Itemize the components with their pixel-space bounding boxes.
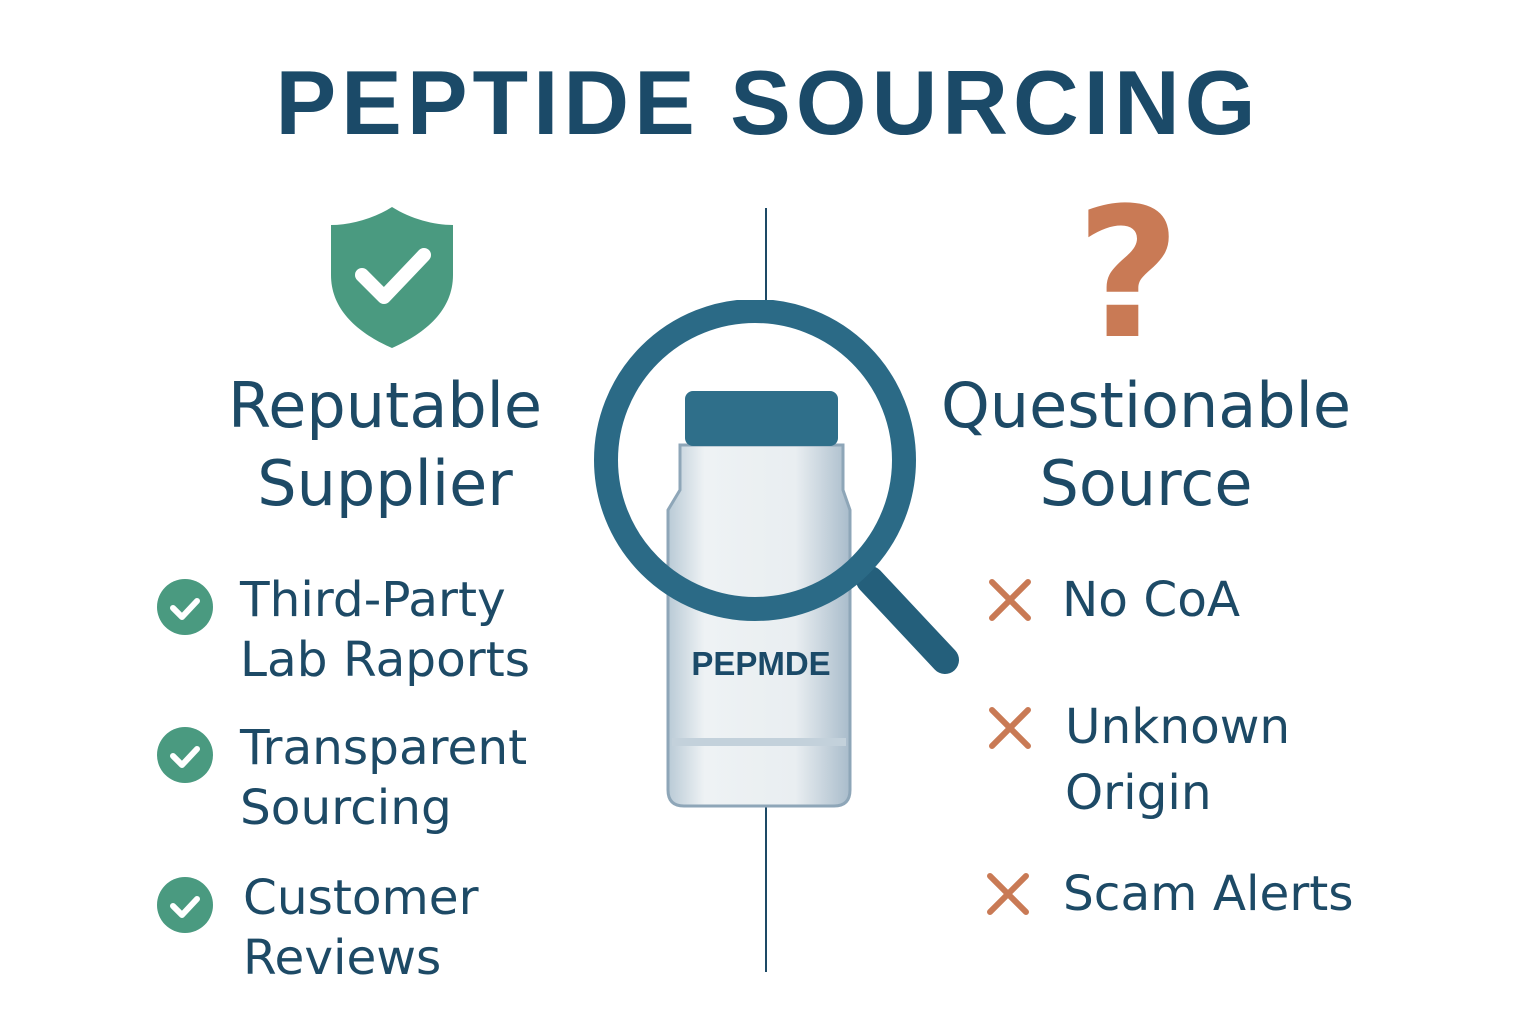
- heading: reputable supplier: [228, 369, 542, 520]
- list: questionable: Unknown: [1065, 699, 1290, 755]
- list: questionable: Scam Alerts: [1063, 866, 1354, 922]
- list: reputable: Sourcing: [240, 780, 452, 836]
- title: PEPTIDE SOURCING: [275, 53, 1261, 154]
- list: questionable: No CoA: [1062, 572, 1240, 628]
- heading: questionable source: Questionable: [941, 369, 1351, 442]
- heading: questionable source: [941, 369, 1351, 520]
- item 1: [989, 572, 1240, 628]
- item 3: [157, 870, 479, 986]
- list: reputable: Transparent: [240, 720, 527, 776]
- icon: vial and magnifier: PEPMDE: [691, 645, 831, 682]
- list: reputable: Reviews: [243, 930, 441, 986]
- list: questionable: [987, 572, 1354, 922]
- list: reputable: [157, 572, 530, 986]
- item 3: [987, 866, 1354, 922]
- item 2: [157, 720, 527, 836]
- heading: questionable source: Source: [1040, 447, 1252, 520]
- icon: vial and magnifier: [594, 300, 959, 808]
- list: reputable: Third-Party: [240, 572, 506, 628]
- item 2: [989, 699, 1290, 821]
- list: reputable: Lab Raports: [240, 632, 530, 688]
- list: reputable: Customer: [243, 870, 479, 926]
- heading: reputable supplier: Reputable: [228, 369, 542, 442]
- item 1: [157, 572, 530, 688]
- heading: reputable supplier: Supplier: [257, 447, 513, 520]
- icon: question mark: ?: [1076, 170, 1180, 379]
- list: questionable: Origin: [1065, 765, 1212, 821]
- icon: shield: [331, 207, 453, 348]
